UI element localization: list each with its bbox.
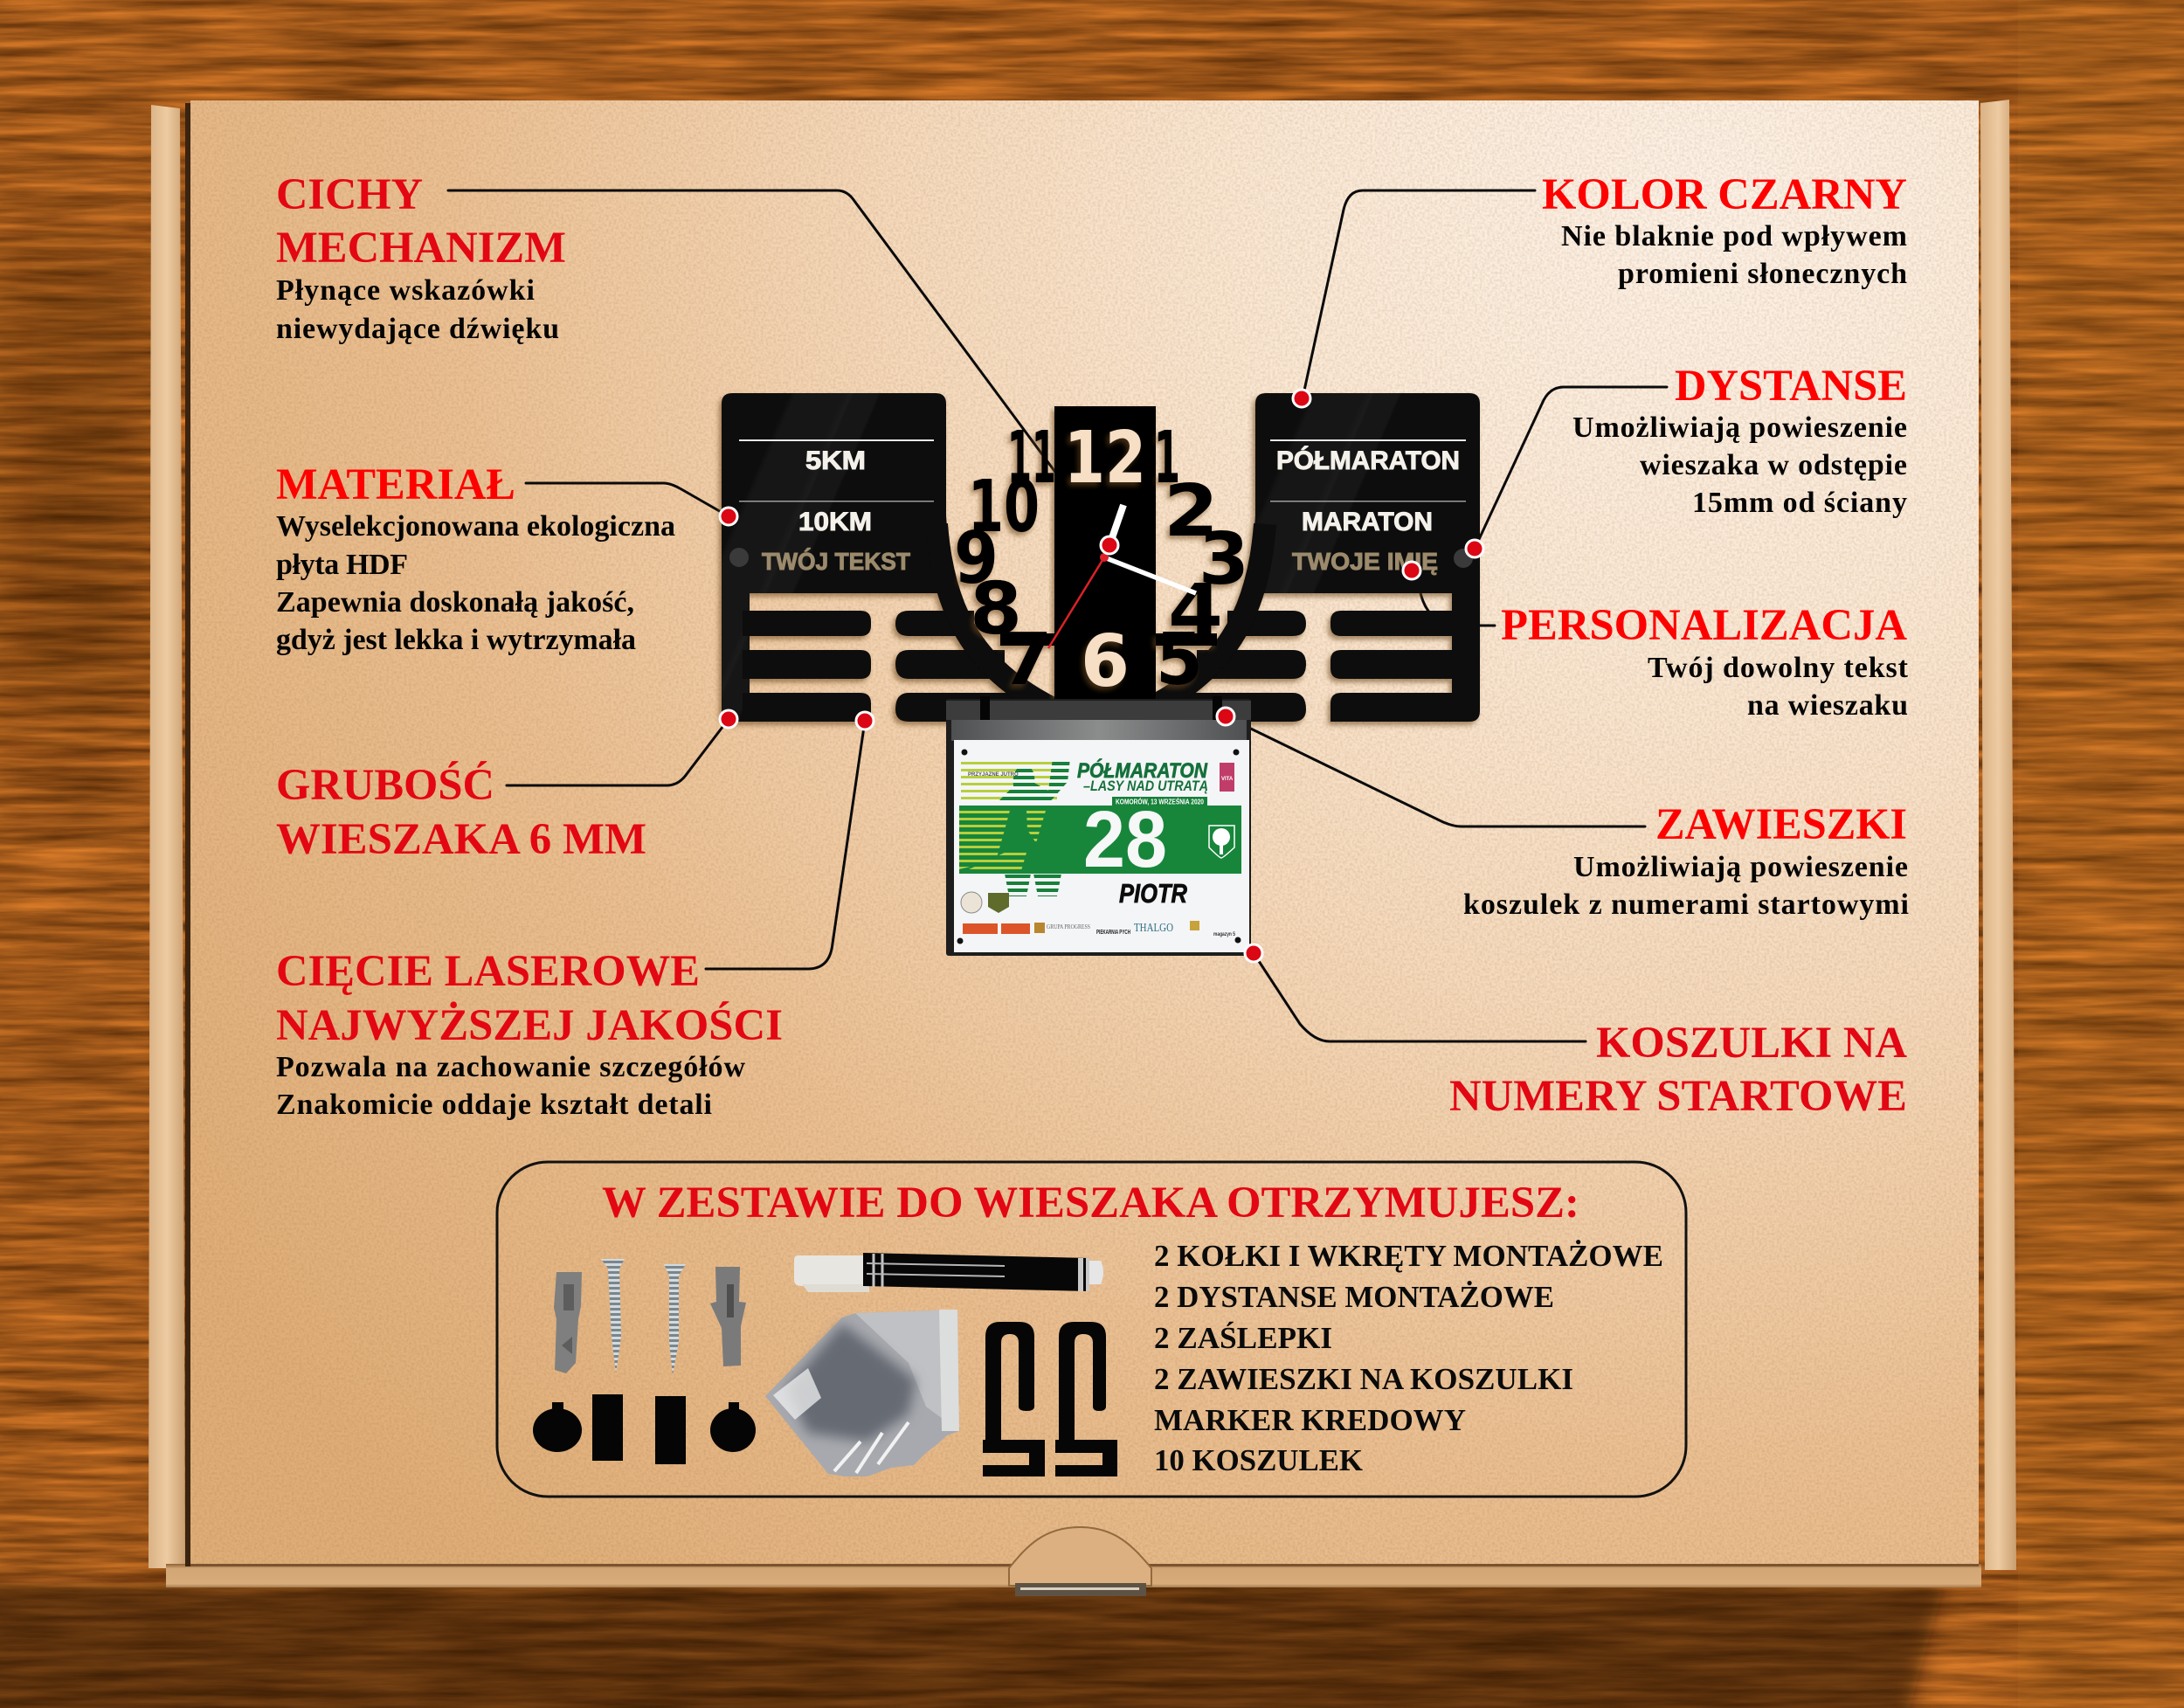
callout: koszulki na numery: NUMERY STARTOWE (1449, 1072, 1907, 1121)
clock numerals: 9 (954, 517, 999, 600)
callout: personalizacja (1501, 601, 1909, 722)
callout: cichy mechanizm: Płynące wskazówki (276, 274, 535, 307)
callout: materiał: Wyselekcjonowana ekologiczna (276, 510, 675, 543)
icon: screws (601, 1259, 686, 1375)
panel outline (497, 1162, 1686, 1497)
kit list: 2 ZAŚLEPKI (1154, 1320, 1332, 1355)
punch holes (957, 750, 1241, 944)
clock numerals: 10 (968, 466, 1040, 549)
sponsor logos (961, 892, 1236, 937)
callout: dystanse: DYSTANSE (1675, 362, 1907, 411)
clock numerals: 4 (1168, 570, 1223, 653)
callout: grubość (276, 761, 646, 864)
bib sheet (954, 740, 1249, 952)
cardboard box (149, 100, 2016, 1596)
callout: cichy mechanizm: MECHANIZM (276, 224, 566, 273)
bottom flap (166, 1564, 1981, 1587)
callout: kolor czarny: promieni słonecznych (1618, 258, 1907, 290)
callout: cięcie laserowe (276, 947, 783, 1121)
callout: dystanse: 15mm od ściany (1692, 487, 1907, 519)
callout: dystanse (1572, 362, 1907, 519)
callout: personalizacja: PERSONALIZACJA (1501, 601, 1907, 650)
kit list: 2 ZAWIESZKI NA KOSZULKI (1154, 1362, 1573, 1396)
callout: grubość: GRUBOŚĆ (276, 761, 494, 810)
callout: materiał: gdyż jest lekka i wytrzymała (276, 624, 636, 656)
callout: cichy mechanizm (276, 170, 566, 345)
callout: personalizacja: Twój dowolny tekst (1648, 652, 1909, 684)
kit list: 2 DYSTANSE MONTAŻOWE (1154, 1280, 1554, 1314)
callout: zawieszki: koszulek z numerami startowymi (1463, 889, 1909, 921)
callout: grubość: WIESZAKA 6 MM (276, 815, 646, 864)
right plate labels (1270, 439, 1473, 575)
right plate and comb (1147, 393, 1480, 722)
lid (190, 100, 1979, 1566)
lid bottom crease (190, 1564, 1979, 1566)
callout: materiał (276, 460, 675, 656)
kit heading: W ZESTAWIE DO WIESZAKA OTRZYMUJESZ: (602, 1179, 1579, 1227)
kit list: 2 KOŁKI I WKRĘTY MONTAŻOWE (1154, 1239, 1663, 1273)
kit list: MARKER KREDOWY (1154, 1403, 1466, 1437)
right plate labels: PÓŁMARATON (1276, 446, 1460, 475)
lid grain (190, 100, 1979, 1566)
icon: spacers (592, 1394, 686, 1464)
lid left crease (185, 103, 190, 1566)
runner stripes (959, 758, 1241, 896)
callout: materiał: płyta HDF (276, 549, 408, 581)
clock numerals: 8 (970, 568, 1022, 651)
clock numerals (954, 417, 1249, 703)
bib number: 28 (1083, 795, 1167, 884)
runner name: PIOTR (1119, 878, 1187, 909)
right callouts (1449, 170, 1909, 1121)
icon: chalk marker (794, 1253, 1103, 1292)
sponsor badge: VITA (1221, 777, 1234, 782)
hanger top bar (946, 701, 1251, 720)
callout: dystanse: wieszaka w odstępie (1640, 449, 1907, 481)
callout: materiał: MATERIAŁ (276, 460, 515, 509)
callout: cichy mechanizm: niewydające dźwięku (276, 313, 559, 345)
right flap (1980, 100, 2016, 1570)
event title: PÓŁMARATON (1077, 758, 1208, 783)
date tag: KOMORÓW, 13 WRZEŚNIA 2020 (1116, 799, 1204, 806)
clock numerals: 6 (1081, 620, 1130, 703)
callout: personalizacja: na wieszaku (1747, 689, 1908, 722)
left callouts (276, 170, 783, 1121)
left flap (149, 105, 185, 1568)
center column (1054, 406, 1156, 702)
callout: materiał: Zapewnia doskonałą jakość, (276, 586, 634, 619)
left plate labels (729, 439, 934, 575)
race bib in sleeve (946, 696, 1251, 956)
leader lines (448, 190, 1667, 1041)
right plate labels: TWOJE IMIĘ (1292, 548, 1438, 575)
event title: –LASY NAD UTRATĄ (1083, 778, 1208, 794)
callout: dystanse: Umożliwiają powieszenie (1572, 411, 1907, 444)
clock numerals: 7 (1000, 619, 1053, 702)
clock numerals: 5 (1156, 619, 1203, 702)
callout: cięcie laserowe: Znakomicie oddaje kształt detali (276, 1089, 712, 1121)
clock numerals: 3 (1199, 518, 1249, 601)
shield emblem (1209, 826, 1234, 858)
box shadow on table (0, 1583, 1945, 1708)
left plate and comb (722, 393, 1054, 722)
callout: zawieszki: Umożliwiają powieszenie (1573, 851, 1908, 883)
callout marker dots (720, 390, 1483, 962)
callout: koszulki na numery (1449, 1019, 1907, 1121)
sponsor logos: GRUPA PROGRESS (1047, 923, 1090, 930)
callout: cięcie laserowe: CIĘCIE LASEROWE (276, 947, 700, 996)
callout: cięcie laserowe: Pozwala na zachowanie szczegółów (276, 1051, 745, 1083)
kit list (1154, 1239, 1663, 1477)
callout: cichy mechanizm: CICHY (276, 170, 423, 219)
icon: bib hangers (983, 1322, 1117, 1476)
callout: cięcie laserowe: NAJWYŻSZEJ JAKOŚCI (276, 1001, 783, 1050)
left plate labels: 10KM (798, 508, 872, 536)
sponsor badge (1220, 763, 1234, 792)
clock numerals: 11 (1007, 417, 1056, 500)
transparent sleeve top (951, 720, 1247, 741)
sponsor logos: THALGO (1134, 922, 1173, 935)
clock numerals: 1 (1154, 417, 1180, 500)
partner logo: PRZYJAZNE JUTRO (968, 772, 1019, 778)
medal hanger clock (722, 393, 1480, 722)
callout: koszulki na numery: KOSZULKI NA (1596, 1019, 1907, 1068)
right plate labels: MARATON (1302, 508, 1433, 536)
left plate labels: TWÓJ TEKST (762, 548, 910, 575)
callout: zawieszki: ZAWIESZKI (1655, 800, 1907, 849)
sponsor logos: magazyn 5 (1213, 932, 1236, 937)
sponsor logos: PIEKARNIA PYCH (1096, 930, 1130, 936)
kit panel (497, 1162, 1686, 1497)
callout: zawieszki (1463, 800, 1909, 921)
left plate labels: 5KM (805, 446, 866, 475)
hooks (980, 696, 1222, 720)
event title (1077, 758, 1208, 794)
icon: blanking caps (533, 1402, 756, 1452)
icon: plastic sleeves (765, 1310, 959, 1476)
clock hands (1048, 505, 1196, 648)
clock numerals: 2 (1164, 470, 1219, 553)
callout: kolor czarny: KOLOR CZARNY (1542, 170, 1907, 219)
sleeve frame (946, 699, 1251, 956)
callout: kolor czarny: Nie blaknie pod wpływem (1561, 220, 1907, 252)
callout: kolor czarny (1542, 170, 1907, 290)
kit list: 10 KOSZULEK (1154, 1443, 1363, 1477)
icon: wall plugs (554, 1267, 746, 1373)
thumb notch (1009, 1527, 1151, 1596)
clock numerals: 12 (1064, 417, 1146, 500)
